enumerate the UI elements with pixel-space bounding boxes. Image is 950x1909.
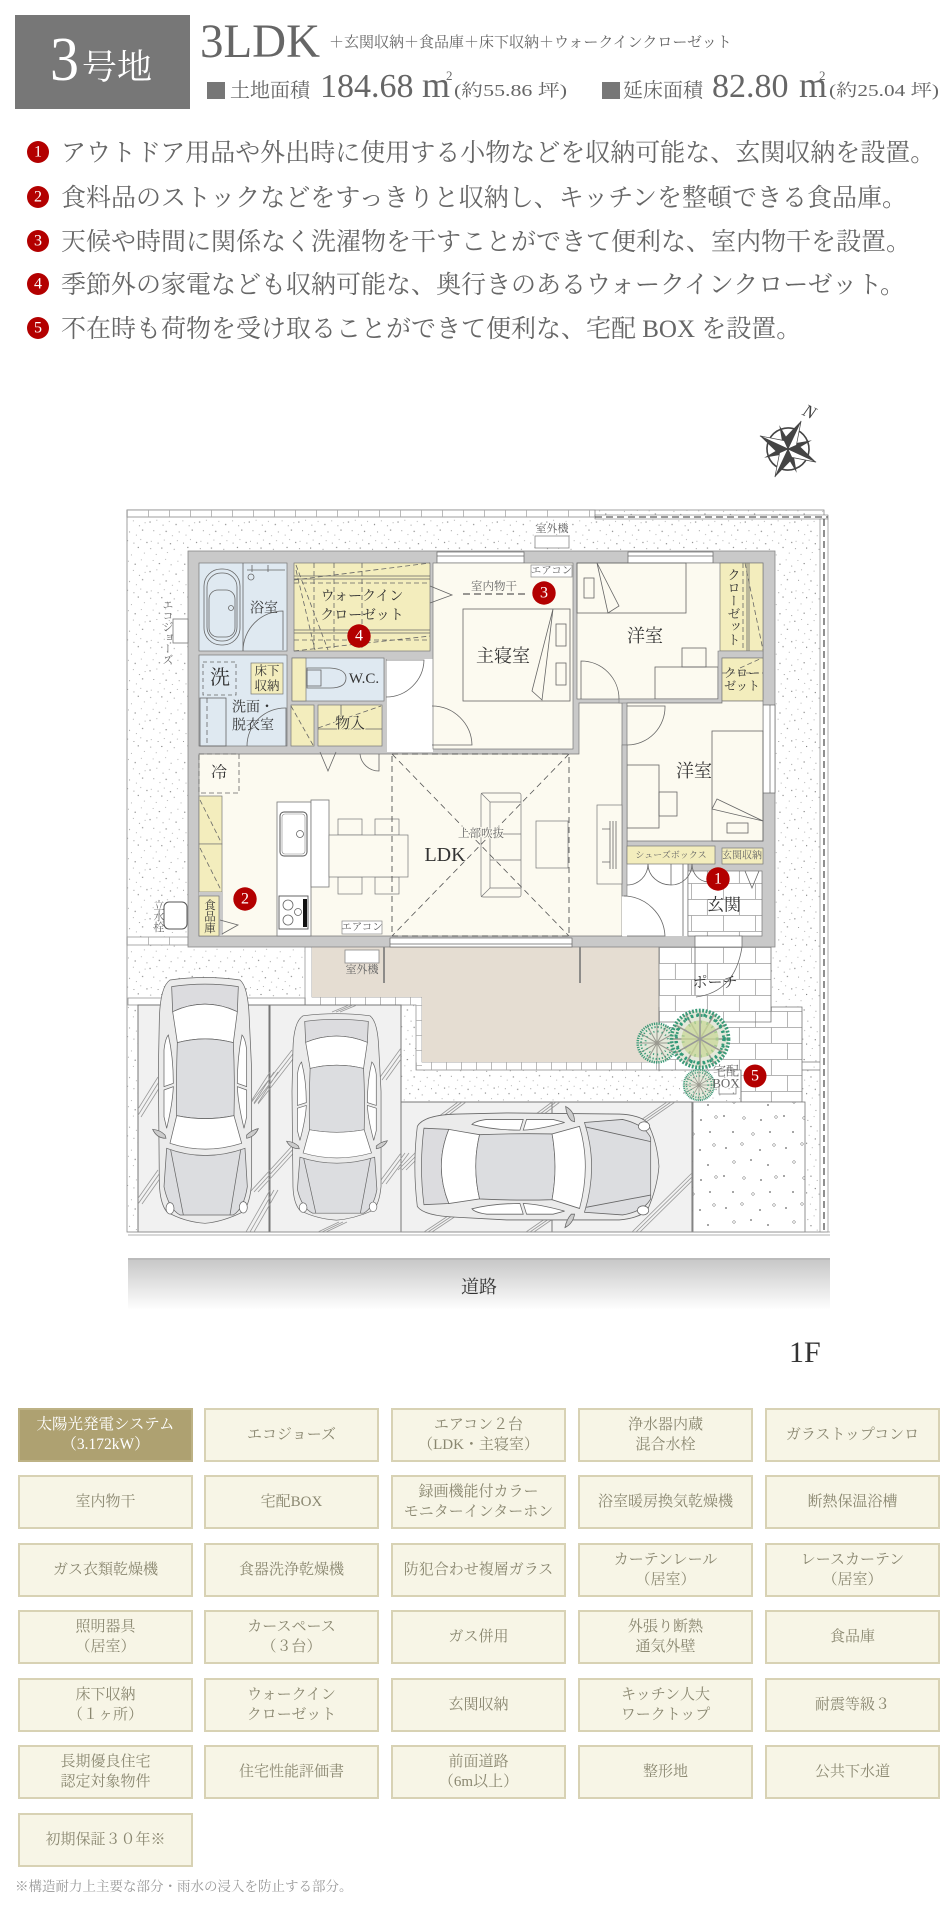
air conditioner LDK: エアコン [341, 922, 383, 933]
closet small [722, 658, 763, 701]
tag: dishwasher: 食器洗浄乾燥機 [239, 1562, 344, 1578]
feature list [27, 139, 935, 343]
storage folding door [320, 752, 379, 771]
room: south-east bedroom [627, 701, 763, 841]
tag: insulation [578, 1610, 753, 1664]
shoe box: シューズボックス [635, 850, 707, 860]
land area stat: 2 [446, 68, 452, 83]
genkan door opening [695, 936, 742, 947]
footnote: ※構造耐力上主要な部分・雨水の浸入を防止する部分。 [15, 1878, 352, 1894]
outdoor unit south: 室外機 [346, 962, 379, 976]
tag: lace curtain: レースカーテン [801, 1552, 904, 1568]
WIC folding door [430, 586, 452, 603]
parking spaces [138, 1005, 692, 1232]
left tile strips [127, 937, 305, 1005]
tag: bathtub [765, 1475, 940, 1529]
tag: performance report [204, 1745, 379, 1799]
icon: north compass: N [799, 400, 820, 424]
tag: lot shape: 整形地 [643, 1764, 688, 1780]
tag: lighting [18, 1610, 193, 1664]
tag: car space [204, 1610, 379, 1664]
outdoor faucet [152, 898, 187, 932]
feature list: 天候や時間に関係なく洗濯物を干すことができて便利な、室内物干を設置。 [61, 228, 911, 256]
porch door [695, 947, 742, 997]
feature list: 季節外の家電なども収納可能な、奥行きのあるウォークインクローゼット。 [61, 271, 905, 299]
tag: front road [391, 1745, 566, 1799]
floor area stat: m [799, 65, 827, 105]
room: washroom: 収納 [254, 678, 280, 693]
room: south-east bedroom: 洋室 [676, 761, 712, 781]
room: washroom: 床下 [254, 663, 280, 678]
floor area stat: (約25.04 坪) [829, 81, 939, 100]
feature list: 食料品のストックなどをすっきりと収納し、キッチンを整頓できる食品庫。 [61, 184, 907, 212]
kitchen counter [277, 800, 329, 936]
tag: warranty: 初期保証３０年※ [45, 1832, 166, 1848]
gravel planting block [693, 1102, 805, 1232]
room: washroom: 洗面・ [232, 700, 274, 716]
lot badge: 3号地: 号地 [82, 48, 152, 87]
tag: stove: ガラストップコンロ [786, 1427, 919, 1443]
entry storage [722, 848, 763, 888]
tag: faucet [578, 1408, 753, 1462]
tag: WIC: ウォークイン [247, 1687, 336, 1703]
room: north-east bedroom [577, 563, 763, 699]
tag: underfloor storage: 床下収納 [75, 1687, 136, 1703]
room: walk-in closet: ウォークイン [321, 590, 403, 604]
marker 3: 3 [540, 584, 548, 602]
tag: lot shape [578, 1745, 753, 1799]
fridge space: 冷 [211, 764, 227, 782]
feature list: 不在時も荷物を受け取ることができて便利な、宅配 BOX を設置。 [61, 315, 801, 343]
tag: insulation: 通気外壁 [635, 1639, 696, 1655]
tag: gas dryer: ガス衣類乾燥機 [53, 1562, 158, 1578]
tag: seismic [765, 1678, 940, 1732]
tag: faucet: 混合水栓 [635, 1437, 696, 1453]
floor area stat: 2 [819, 68, 826, 83]
car 2 [287, 1014, 387, 1220]
tag: aircon: エアコン２台 [434, 1417, 523, 1433]
genkan label: 玄関 [707, 896, 741, 914]
tag: intercom [391, 1475, 566, 1529]
tag: seismic: 耐震等級３ [815, 1697, 890, 1713]
marker 5 [744, 1064, 766, 1088]
tag: aircon [391, 1408, 566, 1462]
room: toilet [292, 658, 384, 701]
tag: lace curtain [765, 1543, 940, 1597]
outdoor faucet: 立水栓 [152, 898, 164, 932]
tag: drying: 室内物干 [75, 1494, 136, 1510]
tag: stove [765, 1408, 940, 1462]
tag: aircon: （LDK・主寝室） [418, 1437, 539, 1453]
terrace posts [384, 947, 580, 983]
water heater [161, 599, 188, 665]
floor area stat [602, 65, 939, 105]
gravel site ground [127, 510, 824, 1232]
marker 3 [532, 581, 556, 605]
pantry: 食品庫 [203, 898, 216, 934]
fridge space [199, 754, 239, 793]
tag: car space: （３台） [261, 1639, 322, 1655]
feature list: アウトドア用品や外出時に使用する小物などを収納可能な、玄関収納を設置。 [61, 139, 935, 167]
lot badge: 3号地: 3 [50, 26, 79, 94]
outdoor unit north: 室外機 [536, 521, 569, 535]
tag: performance report: 住宅性能評価書 [239, 1764, 344, 1780]
tag: ecojoze [204, 1408, 379, 1462]
tag: gas: ガス併用 [448, 1629, 508, 1645]
delivery box [712, 1064, 740, 1094]
tag: entry storage [391, 1678, 566, 1732]
tag: bath dryer: 浴室暖房換気乾燥機 [598, 1494, 733, 1510]
floor label: 1F [789, 1336, 821, 1369]
room: washroom [199, 655, 287, 746]
tag: warranty [18, 1813, 193, 1867]
tv board [597, 805, 622, 884]
hallway white [387, 659, 433, 752]
tag: entry storage: 玄関収納 [448, 1697, 508, 1713]
tag: long-life [18, 1745, 193, 1799]
floor plan type heading: 3LDK [200, 15, 320, 68]
porch label: ポーチ [692, 974, 738, 991]
LDK label: LDK [424, 844, 466, 866]
marker 4: 4 [355, 628, 363, 644]
plant small [684, 1070, 714, 1100]
dining table [329, 819, 408, 894]
tag: curtain rail: カーテンレール [614, 1552, 717, 1568]
tag: underfloor storage: （１ヶ所） [68, 1707, 143, 1723]
closet north-east [720, 563, 763, 651]
pantry [199, 892, 238, 936]
closet small: ゼット [724, 679, 760, 693]
parking stripes [133, 1005, 700, 1232]
floor area stat: 延床面積 [623, 79, 705, 102]
feature list: 3 [34, 232, 42, 250]
void label: 上部吹抜 [458, 826, 504, 840]
tag: drying [18, 1475, 193, 1529]
sofa [481, 793, 521, 897]
tag: intercom: モニターインターホン [404, 1504, 553, 1520]
closet small: クロー [724, 666, 760, 680]
tag: glass: 防犯合わせ複層ガラス [404, 1562, 553, 1578]
delivery box: 宅配 [713, 1064, 739, 1078]
porch outline [659, 1007, 820, 1102]
outdoor unit north [535, 521, 569, 548]
tag: lighting: （居室） [75, 1639, 136, 1655]
marker 4 [347, 624, 371, 648]
marker 2: 2 [241, 890, 249, 908]
tag: bathtub: 断熱保温浴槽 [807, 1494, 898, 1510]
land area stat: (約55.86 坪) [454, 81, 567, 100]
wall between bedroom and closets [619, 651, 763, 703]
WC door [386, 660, 424, 697]
tag: pantry: 食品庫 [830, 1629, 875, 1645]
genkan tile [688, 871, 762, 936]
tag: WIC [204, 1678, 379, 1732]
room: master bedroom: 主寝室 [476, 646, 530, 666]
icon: north compass [747, 400, 829, 490]
entry storage: 玄関収納 [722, 848, 762, 862]
tag: solar [18, 1408, 193, 1462]
room: storage: 物入 [335, 714, 365, 732]
tag: pantry [765, 1610, 940, 1664]
site bottom line [128, 1232, 830, 1235]
wall left of SE bedroom [622, 745, 627, 896]
room: walk-in closet [294, 563, 430, 651]
plant large [671, 1010, 729, 1068]
land area stat: m [422, 65, 450, 105]
room: under-stair storage [291, 705, 314, 746]
feature list: 4 [34, 276, 42, 292]
tag: dishwasher [204, 1543, 379, 1597]
tag: worktop: ワークトップ [621, 1707, 710, 1723]
room: bath: 浴室 [250, 600, 278, 616]
outdoor unit south [345, 950, 379, 976]
tag: worktop [578, 1678, 753, 1732]
floor area stat: 82.80 [712, 68, 788, 105]
coffee table [536, 821, 568, 868]
shoe box [627, 846, 715, 885]
top boundary band [127, 510, 828, 519]
closet north-east: クローゼット [726, 568, 740, 646]
room: washroom: 脱衣室 [232, 716, 274, 734]
right boundary line [820, 519, 828, 1232]
entry [622, 745, 688, 936]
tag: underfloor storage [18, 1678, 193, 1732]
kitchen cabinets [199, 796, 222, 892]
marker 2 [233, 887, 257, 911]
air conditioner north: エアコン [531, 566, 572, 576]
tag: solar: 太陽光発電システム [37, 1416, 174, 1433]
tag: insulation: 外張り断熱 [628, 1619, 703, 1635]
feature list: 2 [34, 188, 42, 206]
room: north-east bedroom: 洋室 [627, 626, 663, 646]
tag: delivery box [204, 1475, 379, 1529]
tag: long-life: 長期優良住宅 [60, 1754, 150, 1770]
tag: sewer: 公共下水道 [815, 1764, 890, 1780]
indoor drying rack: 室内物干 [471, 579, 517, 593]
tag: bath dryer [578, 1475, 753, 1529]
land area stat [207, 65, 567, 105]
feature list: 5 [34, 320, 42, 336]
room: master bedroom [433, 563, 573, 749]
car 3 [415, 1106, 659, 1228]
terrace [312, 947, 659, 1062]
room: storage [318, 705, 382, 746]
room: bath [199, 563, 287, 651]
tag: gas dryer [18, 1543, 193, 1597]
tag: delivery box: 宅配BOX [261, 1494, 322, 1510]
delivery box: BOX [712, 1076, 740, 1090]
extra storage subtitle: ＋玄関収納＋食品庫＋床下収納＋ウォークインクローゼット [329, 33, 732, 51]
tag: front road: 前面道路 [448, 1754, 508, 1770]
marker 5: 5 [751, 1068, 759, 1084]
room: walk-in closet: クローゼット [320, 608, 404, 624]
porch tiles [659, 947, 802, 1102]
tag: solar: （3.172kW） [61, 1436, 150, 1453]
tag: faucet: 浄水器内蔵 [628, 1417, 703, 1433]
door master [432, 706, 472, 745]
land area stat: 土地面積 [230, 79, 312, 102]
lot badge: 3号地 [15, 15, 190, 109]
road: 道路 [461, 1277, 497, 1297]
site plan [127, 510, 830, 1235]
plant left [638, 1024, 676, 1062]
tag: worktop: キッチン人大 [621, 1687, 710, 1703]
tag: sewer [765, 1745, 940, 1799]
tag: car space: カースペース [247, 1619, 336, 1635]
marker 1 [706, 867, 730, 891]
water heater: エコジョーズ [161, 599, 174, 665]
tag: curtain rail: （居室） [635, 1572, 696, 1588]
indoor drying rack [463, 579, 525, 594]
tag: glass [391, 1543, 566, 1597]
marker 1: 1 [714, 870, 722, 888]
windows [390, 552, 775, 947]
room: LDK floor [199, 703, 622, 936]
tag: lighting: 照明器具 [75, 1619, 136, 1635]
tile paving band around terrace [305, 947, 661, 1070]
tag: front road: （6m以上） [439, 1774, 518, 1790]
tag: long-life: 認定対象物件 [60, 1774, 150, 1790]
tag: WIC: クローゼット [247, 1707, 336, 1723]
tag: ecojoze: エコジョーズ [247, 1427, 336, 1443]
void dashed area [392, 754, 569, 936]
tag: lace curtain: （居室） [822, 1572, 882, 1588]
feature list: 1 [34, 144, 42, 160]
house walls [188, 551, 775, 947]
land area stat: 184.68 [320, 68, 414, 105]
room: toilet: W.C. [349, 671, 379, 687]
tag: curtain rail [578, 1543, 753, 1597]
room: washroom: 洗 [210, 666, 230, 689]
car 1 [153, 977, 258, 1223]
road [128, 1258, 830, 1310]
tag: intercom: 録画機能付カラー [418, 1484, 538, 1500]
tag: gas [391, 1610, 566, 1664]
